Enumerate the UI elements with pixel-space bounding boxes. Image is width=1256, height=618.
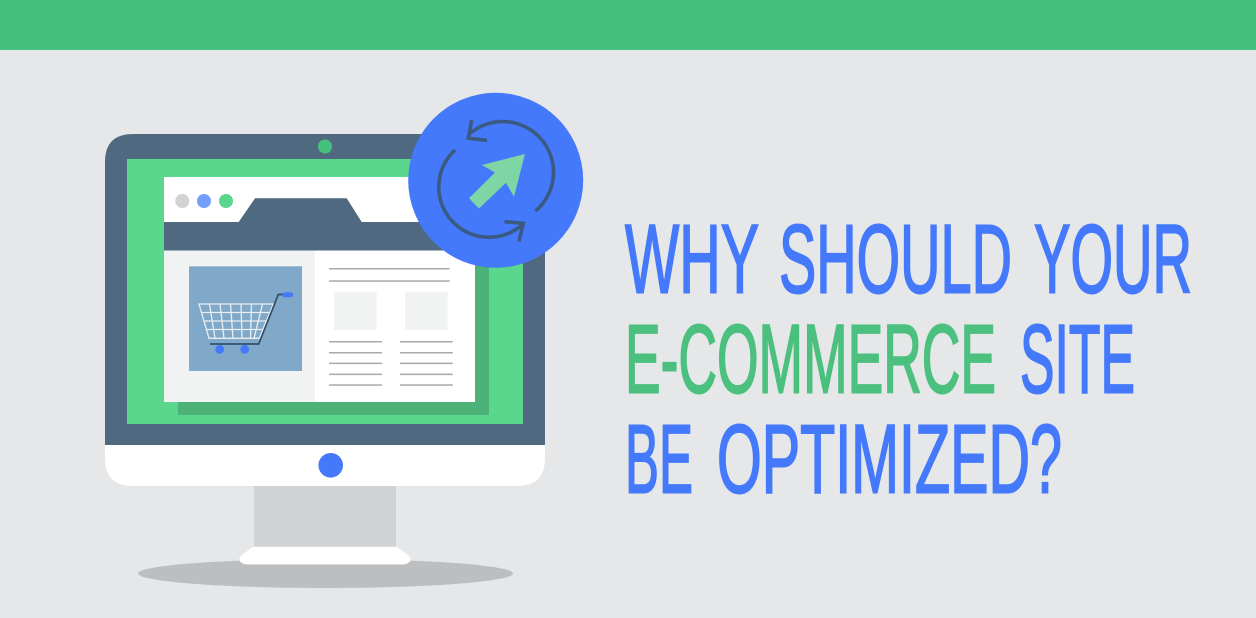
power button xyxy=(318,453,343,478)
cart frame xyxy=(210,294,283,344)
article text lines xyxy=(329,341,453,386)
monitor stand base xyxy=(239,547,411,564)
cart basket xyxy=(199,304,273,338)
article heading lines xyxy=(329,268,450,282)
title line 2: SITE xyxy=(1020,304,1135,414)
icon: shopping cart xyxy=(199,292,293,354)
title line 1: SHOULD xyxy=(779,204,1012,314)
webcam dot xyxy=(318,140,332,154)
icon: optimization badge xyxy=(408,93,583,268)
browser toolbar xyxy=(164,222,475,250)
floor shadow xyxy=(138,559,513,588)
title xyxy=(625,204,1192,514)
refresh arrows xyxy=(439,120,553,242)
browser window shadow xyxy=(178,240,489,415)
browser title bar xyxy=(164,177,475,222)
badge circle xyxy=(408,93,583,268)
browser tab xyxy=(239,198,362,222)
illustration: desktop monitor xyxy=(105,134,545,588)
window dots xyxy=(175,194,233,208)
page left column xyxy=(164,250,315,402)
title line 3: BE xyxy=(625,404,693,514)
top green band xyxy=(0,0,1256,50)
browser window xyxy=(164,177,475,402)
cart handle xyxy=(282,292,293,297)
monitor chin xyxy=(105,445,545,486)
product image xyxy=(189,266,302,371)
green growth arrow xyxy=(469,154,525,208)
article thumbnails xyxy=(334,292,448,330)
page right column xyxy=(315,250,475,402)
green screen xyxy=(127,159,523,424)
title line 1: WHY xyxy=(625,204,758,314)
monitor bezel xyxy=(105,134,545,445)
cart wheels xyxy=(215,345,249,354)
monitor stand neck xyxy=(254,486,396,547)
